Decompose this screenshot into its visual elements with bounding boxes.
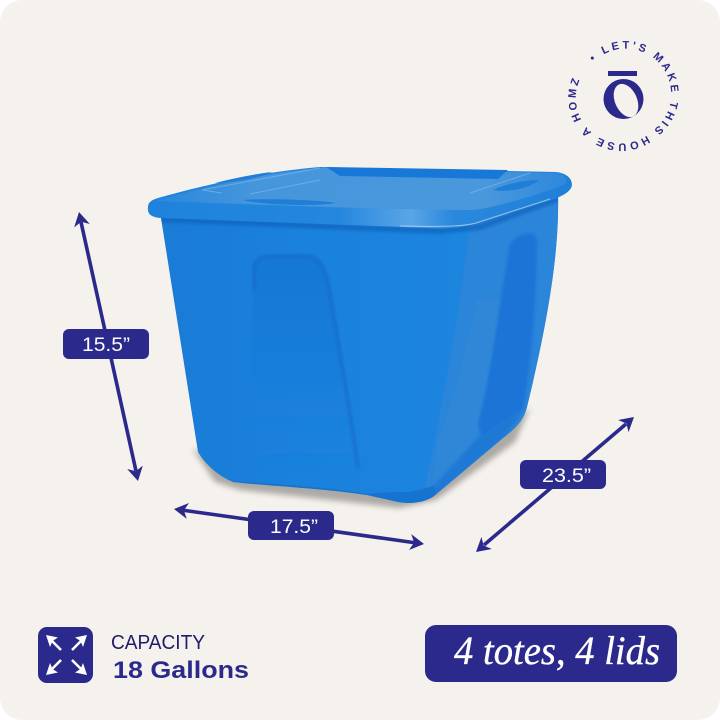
lid handles xyxy=(215,172,539,205)
tote photo xyxy=(148,167,572,510)
base band xyxy=(233,481,436,503)
capacity value: 18 Gallons xyxy=(113,657,249,684)
front recess xyxy=(258,258,328,300)
logo mark xyxy=(604,71,644,121)
depth label xyxy=(520,460,606,489)
lid highlights xyxy=(202,168,530,194)
under lid shade xyxy=(155,198,560,231)
callout: contents: 4 totes, 4 lids xyxy=(454,628,660,673)
icon: capacity expand arrows xyxy=(38,627,93,683)
lid inset xyxy=(326,167,508,179)
width label: 17.5” xyxy=(270,517,318,538)
width label xyxy=(248,511,334,540)
height dimension xyxy=(63,210,149,483)
side face xyxy=(420,190,560,510)
front recess edge xyxy=(254,256,358,468)
lower side band xyxy=(432,414,520,498)
depth arrow xyxy=(471,411,639,558)
lid rim xyxy=(148,167,572,228)
corner strip xyxy=(432,300,505,495)
capacity label: CAPACITY xyxy=(111,632,205,654)
side recess xyxy=(478,233,537,436)
callout: contents xyxy=(425,625,677,682)
width dimension xyxy=(173,501,425,552)
height label: 15.5” xyxy=(82,335,130,356)
circular slogan: • LET'S MAKE THIS HOUSE A HOMZ xyxy=(568,41,679,152)
tote body xyxy=(150,190,570,510)
height label xyxy=(63,329,149,359)
capacity text xyxy=(111,632,249,684)
depth label: 23.5” xyxy=(542,466,591,487)
depth dimension xyxy=(471,411,639,558)
lid xyxy=(148,167,572,228)
floor shadow xyxy=(192,408,530,508)
lid top surface xyxy=(156,168,567,210)
height arrow xyxy=(71,210,146,483)
width arrow xyxy=(173,501,425,552)
logo badge xyxy=(568,41,679,152)
